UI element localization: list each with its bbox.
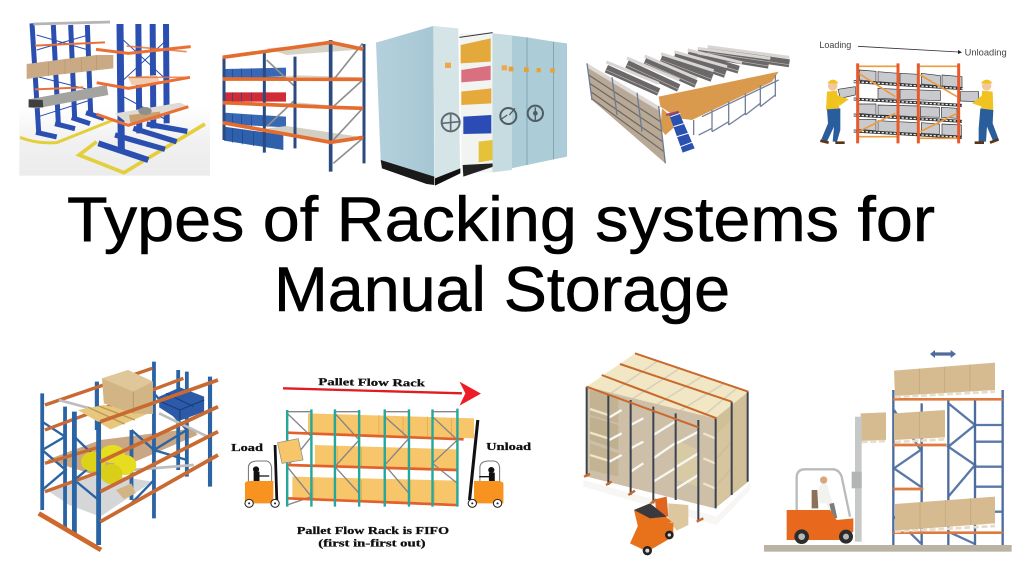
illustration: drive-in racking with forklift xyxy=(583,353,750,555)
label: Loading: Loading xyxy=(819,40,851,50)
label: Load: Load xyxy=(231,443,263,454)
icon: worker unloading xyxy=(972,80,999,143)
icon: worker loading xyxy=(820,80,849,143)
rack frame and pallets xyxy=(287,409,474,507)
arrow: loading to unloading xyxy=(858,46,962,54)
illustration: cantilever racks xyxy=(19,0,210,176)
illustration: selective pallet rack with mixed loads xyxy=(39,362,218,550)
label: Unload: Unload xyxy=(486,442,532,453)
rack frame xyxy=(893,390,1003,545)
illustration: multi-tier mezzanine racking xyxy=(587,47,789,163)
arrow: flow direction xyxy=(283,382,481,406)
arrow: pallet movement xyxy=(930,350,956,358)
forklift xyxy=(787,417,862,544)
pallet loads xyxy=(861,363,995,532)
title line 1: Types of Racking systems for xyxy=(67,185,935,255)
illustration: long-span shelving rack xyxy=(223,40,364,172)
title line 2: Manual Storage xyxy=(274,255,730,325)
illustration: pallet flow rack xyxy=(231,377,532,550)
icon: forklift loading xyxy=(245,439,303,507)
title xyxy=(67,185,935,325)
floor xyxy=(764,545,1012,552)
illustration: push-back rack with side-view forklift xyxy=(764,350,1012,552)
illustration: mobile compactor cabinets xyxy=(376,26,567,186)
icon: forklift unloading xyxy=(468,420,503,507)
cartons and rack frame xyxy=(838,63,979,143)
illustration: carton flow rack xyxy=(819,40,1007,143)
caption: first in first out: (first in-first out) xyxy=(318,539,426,550)
caption: FIFO: Pallet Flow Rack is FIFO xyxy=(297,526,449,537)
label: Unloading: Unloading xyxy=(965,47,1007,57)
label: Pallet Flow Rack: Pallet Flow Rack xyxy=(318,377,425,389)
